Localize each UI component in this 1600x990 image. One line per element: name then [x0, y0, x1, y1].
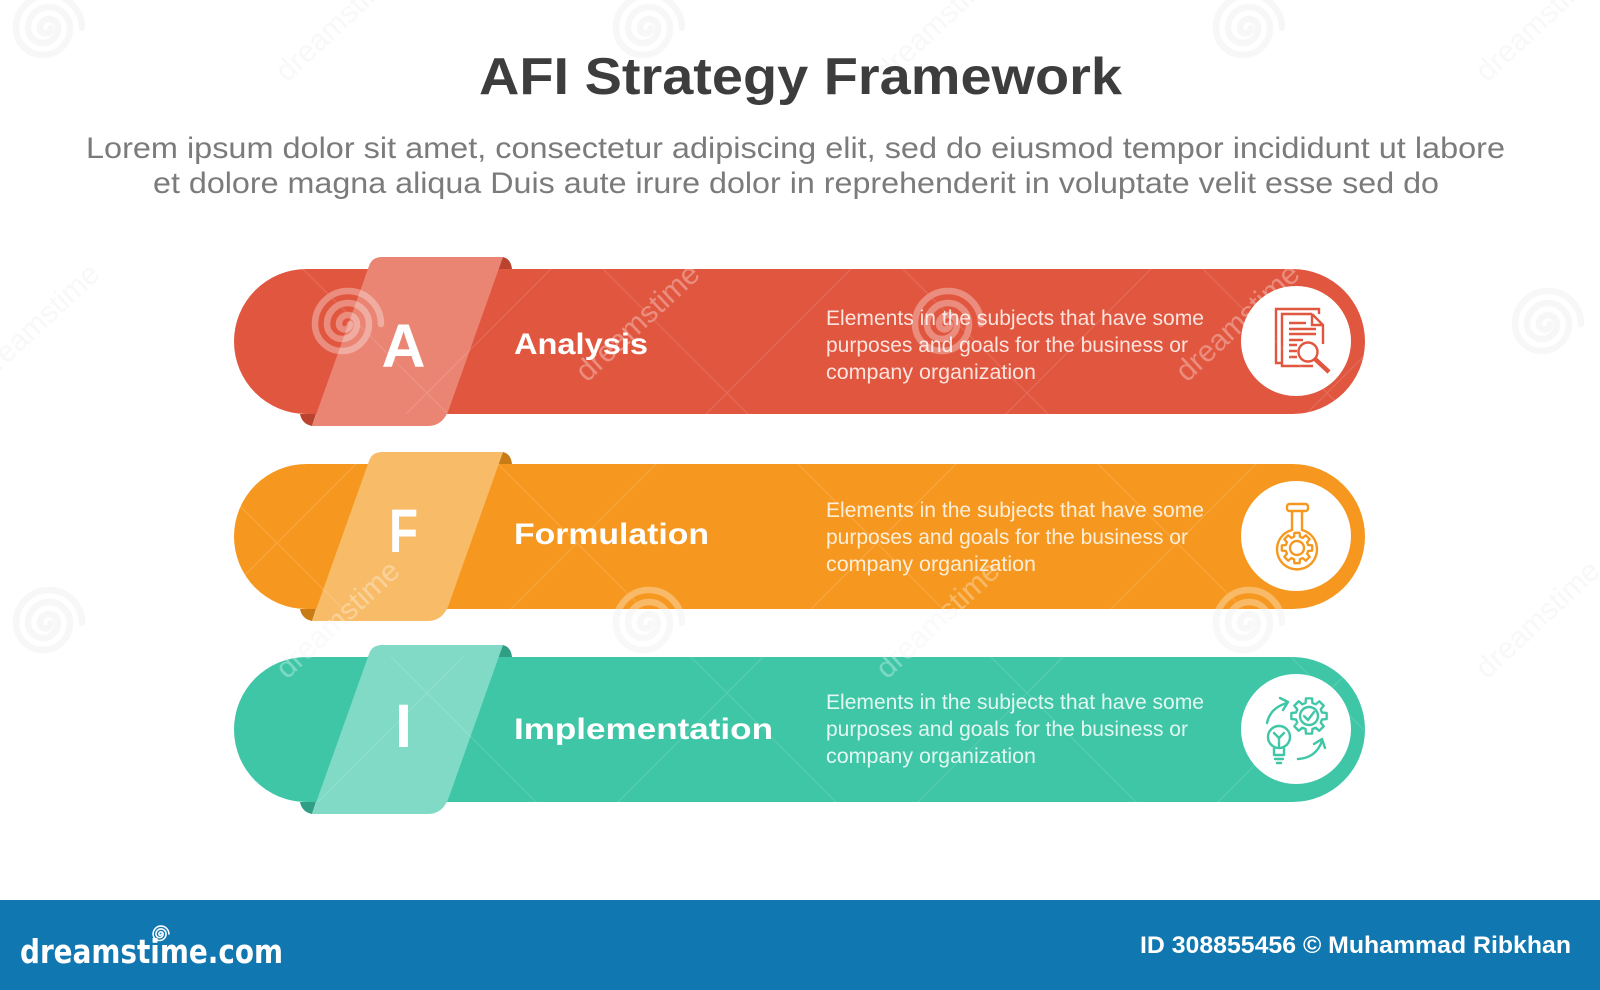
description: implementation: Elements in the subjects that have some [826, 691, 1204, 714]
letter I: I [395, 692, 412, 760]
letter A: A [381, 312, 426, 380]
background watermark: dreamstime [269, 554, 406, 685]
overlay watermark: dreamstime [869, 554, 1006, 685]
description: analysis [826, 307, 1204, 384]
description: formulation: purposes and goals for the business or [826, 526, 1188, 549]
overlay watermark [234, 257, 1365, 802]
subtitle: Lorem ipsum dolor sit amet, consectetur adipiscing elit, sed do eiusmod tempor incididunt ut labore [86, 132, 1505, 165]
description: formulation: Elements in the subjects that have some [826, 499, 1204, 522]
subtitle: et dolore magna aliqua Duis aute irure dolor in reprehenderit in voluptate velit esse sed do [153, 167, 1439, 200]
icon: document with magnifier [1241, 286, 1351, 396]
overlay watermark: dreamstime [1169, 257, 1306, 388]
description: analysis: Elements in the subjects that have some [826, 307, 1204, 330]
panel: implementation [234, 645, 1365, 814]
title: AFI Strategy Framework [479, 48, 1122, 106]
icon: flask with gear [1241, 481, 1351, 591]
panel: formulation [234, 452, 1365, 621]
description: analysis: company organization [826, 361, 1036, 384]
background watermark [0, 0, 1600, 685]
ribbon I [312, 645, 503, 814]
description: implementation [826, 691, 1204, 768]
description: analysis: purposes and goals for the business or [826, 334, 1188, 357]
label: analysis: Analysis [514, 328, 648, 361]
description: formulation: company organization [826, 553, 1036, 576]
subtitle [86, 132, 1505, 200]
overlay watermark: dreamstime [569, 257, 706, 388]
description: implementation: company organization [826, 745, 1036, 768]
panel: analysis [234, 257, 1365, 426]
ribbon F [312, 452, 503, 621]
description: implementation: purposes and goals for the business or [826, 718, 1188, 741]
footer credit: ID 308855456 © Muhammad Ribkhan [1140, 932, 1571, 959]
overlay watermark: dreamstime [269, 554, 406, 685]
ribbon A [312, 257, 503, 426]
label: implementation: Implementation [514, 713, 773, 746]
label: formulation: Formulation [514, 518, 709, 551]
icon: gear, bulb and cycle arrows [1241, 674, 1351, 784]
letter F: F [389, 497, 418, 565]
footer banner [0, 900, 1600, 990]
description: formulation [826, 499, 1204, 576]
footer logo: dreamstime.com [20, 932, 283, 971]
background watermark: dreamstime [869, 554, 1006, 685]
